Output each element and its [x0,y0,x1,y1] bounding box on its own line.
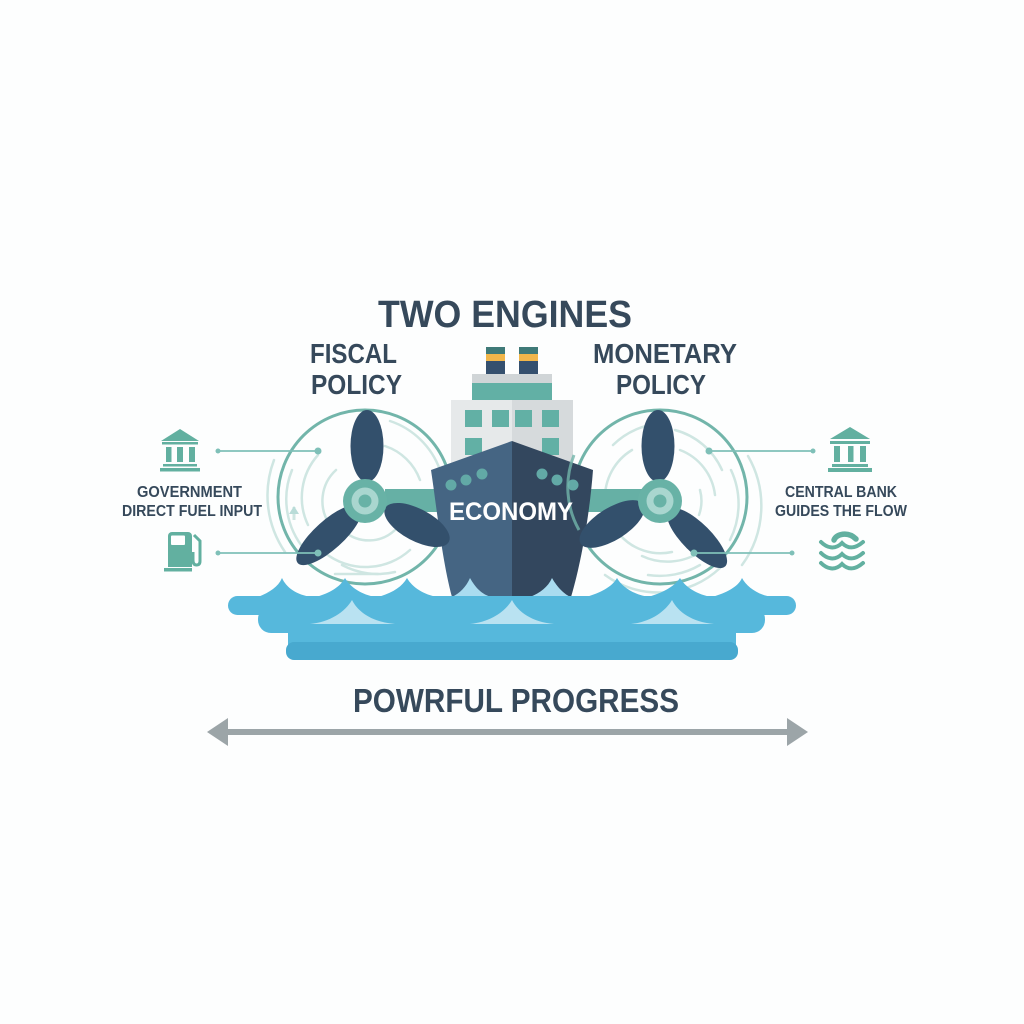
windows [465,410,559,455]
heading: fiscal policy: FISCAL [310,338,397,369]
connector lines: right [690,448,816,556]
icon: fuel pump [164,532,200,572]
right label text: CENTRAL BANK [785,484,897,501]
water bands [228,596,796,615]
icon: government bank [160,429,200,472]
water [228,578,796,660]
title: TWO ENGINES [378,294,632,336]
right label text [775,484,908,520]
right label text: GUIDES THE FLOW [775,503,908,520]
left label text: GOVERNMENT [137,484,242,501]
left label text: DIRECT FUEL INPUT [122,503,262,520]
arrow: progress [207,718,808,746]
left label text [122,484,262,520]
cabin block [451,400,512,475]
heading: monetary policy [593,338,737,400]
icon: water waves [821,534,863,568]
connector lines: left [216,448,322,556]
ship hull [431,441,593,597]
hull label: ECONOMY [449,498,573,526]
wave crests [258,578,772,597]
heading: fiscal policy: POLICY [311,369,402,400]
heading: monetary policy: POLICY [616,369,706,400]
funnels [486,347,538,374]
heading: fiscal policy [310,338,402,400]
left propeller ring and shaft [267,410,452,584]
heading: monetary policy: MONETARY [593,338,737,369]
left propeller blades and hub [288,410,456,574]
footer label: POWRFUL PROGRESS [353,682,679,719]
icon: central bank [828,427,872,472]
upper deck [472,374,552,383]
right propeller blades and hub [568,410,736,577]
wave highlights [310,600,714,624]
right propeller ring and shaft [573,410,761,592]
ship superstructure [451,347,573,475]
